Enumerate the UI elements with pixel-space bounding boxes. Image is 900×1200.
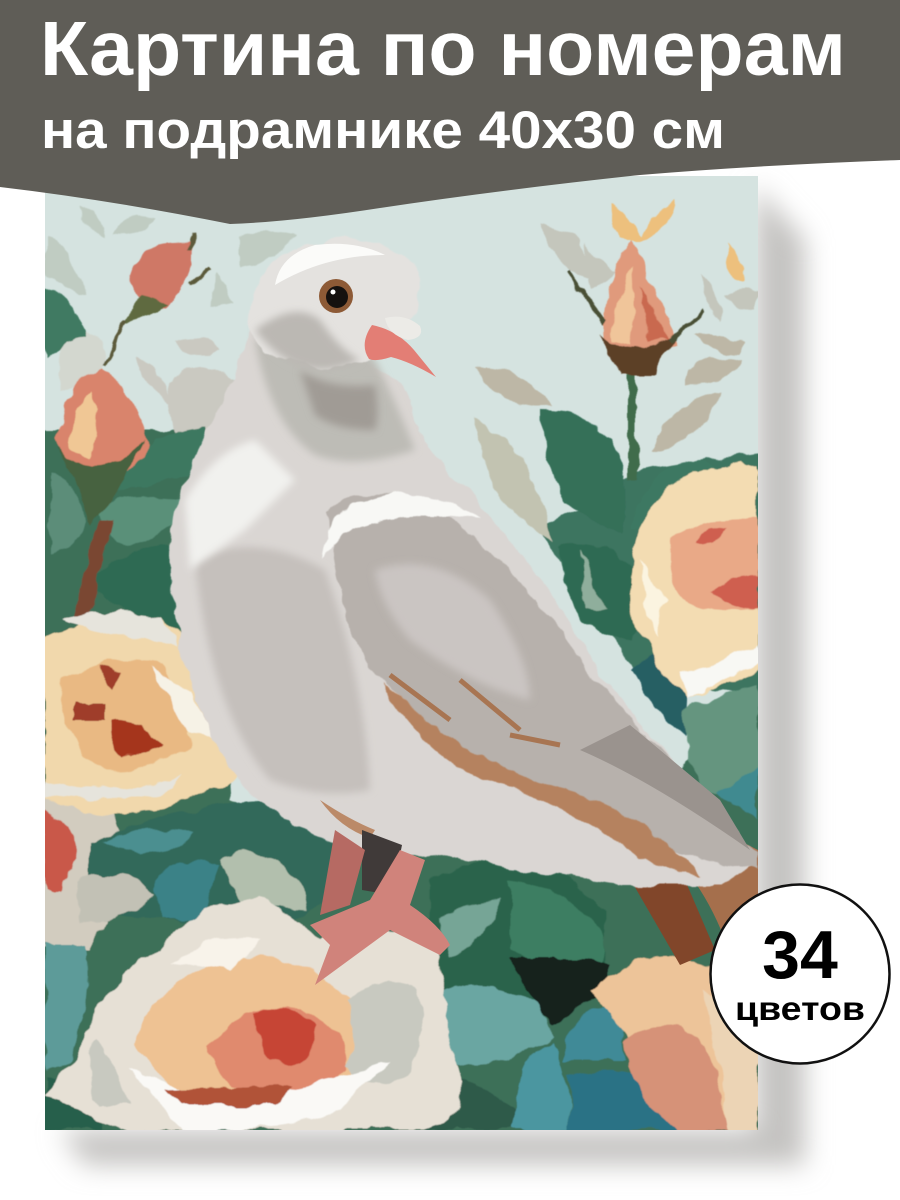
big bottom rose [45, 895, 461, 1130]
beak [365, 325, 436, 377]
eye [319, 279, 353, 313]
canvas shadow [60, 185, 805, 1165]
icon: dove bird [170, 238, 758, 985]
subtitle: на подрамнике 40х30 см [41, 101, 725, 160]
neck grey [255, 329, 415, 461]
body [170, 320, 752, 885]
bottom right rose [590, 955, 727, 1120]
lower leaves [90, 800, 350, 923]
right bud [604, 240, 675, 352]
background base foliage [30, 430, 780, 1150]
pale leaves top [45, 205, 295, 305]
badge: colour count: цветов [735, 990, 865, 1027]
title: Картина по номерам [40, 6, 846, 92]
right leaves [538, 408, 624, 512]
badge: colour count: 34 [762, 917, 838, 993]
header banner [0, 0, 900, 224]
left leaves [122, 426, 206, 484]
left rose [45, 614, 245, 815]
left buds [130, 243, 191, 308]
tail [698, 844, 758, 930]
head [250, 238, 421, 366]
legs [362, 830, 402, 895]
right rose [631, 460, 758, 700]
breast shade [195, 547, 370, 793]
painting on canvas [30, 176, 780, 1150]
wing [330, 494, 758, 870]
badge: colour count [710, 884, 890, 1064]
